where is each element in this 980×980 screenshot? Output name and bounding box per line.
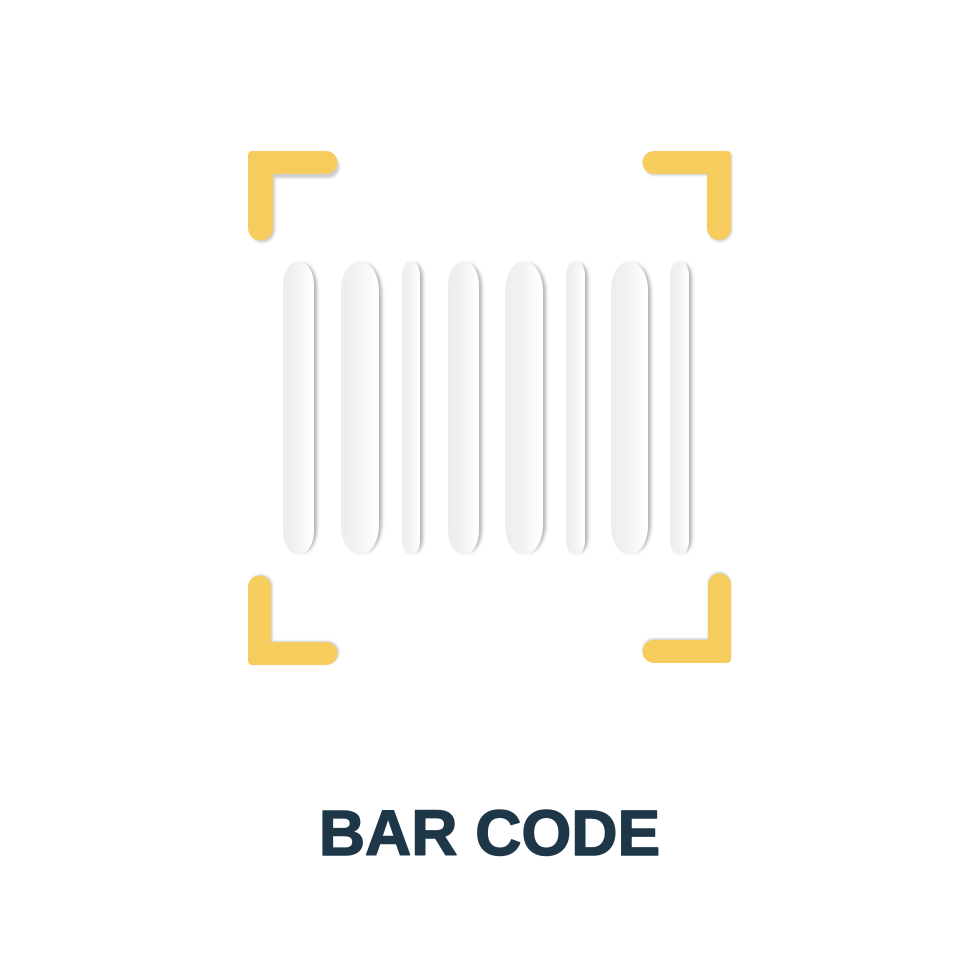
bar code: white embossed bars — [283, 261, 692, 555]
icon: bottom-left yellow corner bracket — [248, 574, 339, 665]
bar 4 — [448, 261, 482, 555]
bar 8 — [670, 261, 692, 555]
bar 3 — [402, 261, 423, 555]
bar 5 — [505, 261, 546, 555]
bar 2 — [341, 261, 382, 555]
bar 6 — [566, 261, 588, 555]
title: BAR CODE — [319, 797, 660, 869]
icon: top-right yellow corner bracket — [642, 151, 732, 242]
bar 1 — [283, 261, 317, 555]
icon: bottom-right yellow corner bracket — [642, 572, 731, 663]
icon: top-left yellow corner bracket — [248, 151, 340, 242]
bar 7 — [611, 261, 651, 555]
